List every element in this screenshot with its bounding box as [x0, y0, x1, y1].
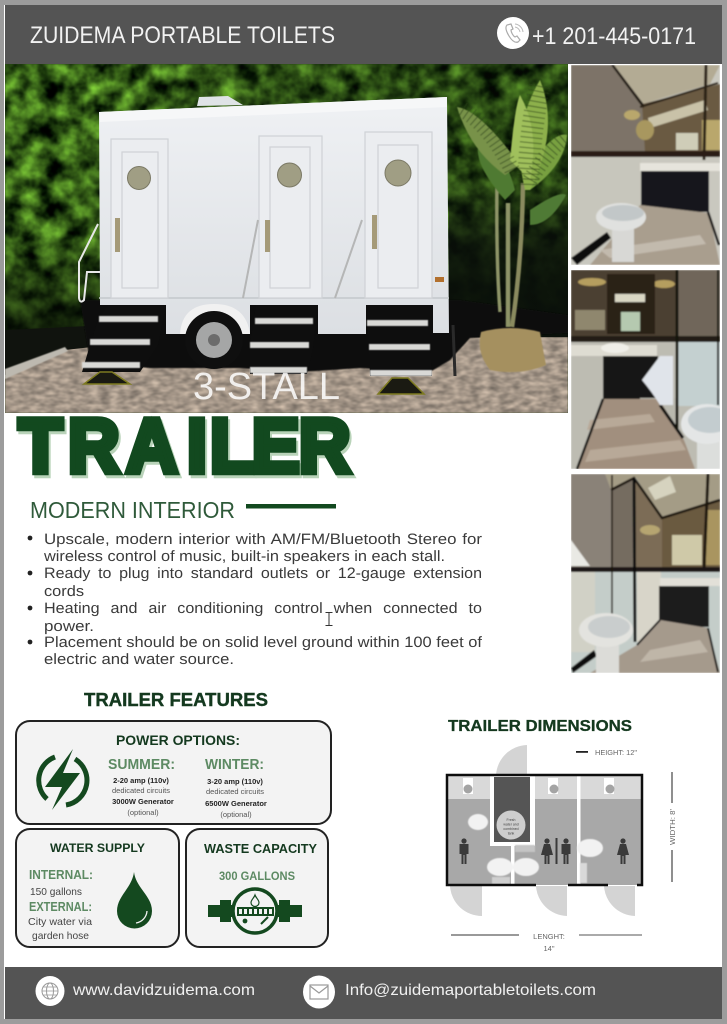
internal capacity: 150 gallons: [30, 886, 82, 898]
bullet list: wireless control of music, built-in speakers in each stall.: [43, 548, 445, 565]
door handles: [115, 215, 377, 252]
email: Info@zuidemaportabletoilets.com: [345, 982, 596, 999]
length label: 14": [543, 944, 555, 953]
section heading: modern interior: MODERN INTERIOR: [30, 497, 235, 523]
bullet list: Upscale, modern interior with AM/FM/Bluetooth Stereo for: [44, 531, 482, 548]
summer column: dedicated circuits: [112, 786, 170, 795]
door medallions: [128, 160, 411, 190]
sinks: [468, 814, 603, 884]
interior photo 1: [571, 65, 720, 265]
summer column: 2-20 amp (110v): [113, 776, 169, 785]
winter column: [205, 757, 267, 819]
hand rails: [79, 220, 362, 302]
outer walls: [447, 775, 642, 885]
summer column: 3000W Generator: [112, 797, 174, 806]
door swings: [450, 745, 635, 916]
people icons: [460, 838, 629, 864]
website: www.davidzuidema.com: [72, 982, 255, 999]
bullet list: [28, 531, 483, 668]
bullet list: Ready to plug into standard outlets or 12-gauge extension: [44, 565, 482, 582]
winter column: WINTER:: [205, 757, 264, 773]
header phone number: +1 201-445-0171: [532, 23, 696, 50]
length label: LENGHT:: [533, 932, 565, 941]
main photo: white trailer: [5, 64, 568, 413]
winter column: 3-20 amp (110v): [207, 777, 263, 786]
palm tree: [457, 80, 567, 327]
text cursor: [326, 612, 332, 626]
holding tank: Fresh: [507, 818, 516, 822]
icon: waste meter: [208, 889, 302, 933]
panel: waste capacity: [186, 829, 328, 947]
main title: trailer: TRAILER: [21, 406, 353, 491]
icon: phone: [497, 17, 529, 49]
external source: EXTERNAL:: [29, 900, 92, 914]
stair blocks: [82, 305, 432, 376]
dark utility room: [494, 777, 530, 842]
ac unit: [197, 96, 243, 106]
external source: City water via: [28, 916, 92, 928]
icon: lightning bolt: [39, 749, 87, 810]
heading: trailer features: TRAILER FEATURES: [84, 689, 268, 710]
power options heading: POWER OPTIONS:: [116, 732, 240, 748]
external source: garden hose: [32, 930, 89, 942]
panel: water supply: [16, 829, 179, 947]
external source: [28, 900, 92, 942]
winter column: dedicated circuits: [206, 787, 264, 796]
icon: water drop: [117, 872, 152, 928]
step treads: [82, 316, 432, 376]
bullet list: Placement should be on solid level ground within 100 feet of: [44, 634, 483, 651]
white walls: [490, 776, 580, 885]
paved ground: [5, 337, 568, 413]
wheel: [180, 304, 250, 369]
internal capacity: INTERNAL:: [29, 868, 93, 882]
root ball: [480, 328, 546, 372]
water supply heading: WATER SUPPLY: [50, 841, 145, 855]
summer column: SUMMER:: [108, 757, 175, 773]
icon: envelope: [303, 976, 335, 1008]
main title: trailer: TRAILER: [19, 403, 351, 488]
holding tank: combined: [503, 827, 519, 831]
header bar: [5, 5, 722, 64]
bullet list: cords: [44, 583, 84, 600]
bullet list: power.: [44, 618, 94, 635]
trailer body: [99, 97, 449, 334]
holding tank: tank: [508, 832, 515, 836]
interior photo 3: [571, 474, 720, 673]
summer column: [108, 757, 175, 817]
width label: [670, 772, 677, 882]
tail lights: [435, 277, 444, 282]
height label: HEIGHT: 12": [595, 750, 638, 757]
header title: ZUIDEMA PORTABLE TOILETS: [30, 22, 335, 49]
waste capacity heading: WASTE CAPACITY: [204, 842, 318, 856]
internal capacity: [29, 868, 93, 898]
3-stall label: 3-STALL: [193, 366, 340, 408]
heading: trailer dimensions: TRAILER DIMENSIONS: [448, 718, 632, 735]
summer column: (optional): [127, 808, 159, 817]
waste capacity value: 300 GALLONS: [219, 871, 295, 883]
winter column: 6500W Generator: [205, 799, 267, 808]
bullet list: electric and water source.: [44, 651, 234, 668]
toilets: [463, 778, 614, 794]
doors: [111, 132, 432, 298]
holding tank: water and: [503, 822, 519, 826]
step supports: [84, 372, 424, 394]
floor plan: [447, 745, 642, 916]
bullet list: Heating and air conditioning control when connected to: [44, 600, 482, 617]
width label: WIDTH: 8': [670, 809, 677, 845]
height label: [576, 750, 638, 757]
footer bar: [5, 967, 722, 1019]
holding tank: [496, 810, 526, 840]
panel: power options: [16, 721, 331, 824]
interior photo 2: [571, 270, 727, 469]
jack stand: [453, 325, 455, 376]
winter column: (optional): [220, 810, 252, 819]
icon: globe: [36, 976, 64, 1006]
length label: [451, 932, 642, 953]
